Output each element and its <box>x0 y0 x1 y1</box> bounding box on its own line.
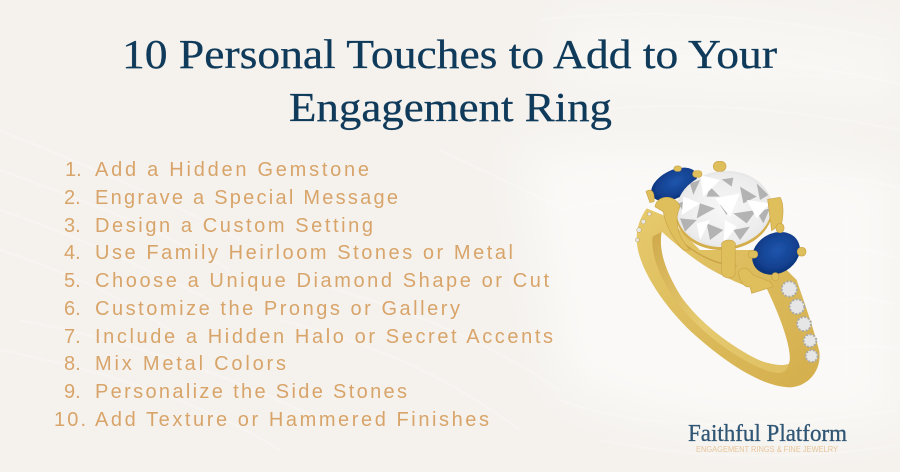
gallery rim <box>672 168 776 255</box>
accent diamonds <box>782 281 818 362</box>
numbered list: Customize the Prongs or Gallery <box>95 298 460 320</box>
numbered list: 1. <box>65 159 82 181</box>
title: Engagement Ring <box>289 84 612 130</box>
numbered list: 8. <box>64 353 81 375</box>
numbered list: 5. <box>64 270 81 292</box>
numbered list: Add Texture or Hammered Finishes <box>95 409 489 431</box>
numbered list: Add a Hidden Gemstone <box>95 159 369 181</box>
title: 10 Personal Touches to Add to Your <box>122 31 777 77</box>
left accent diamonds <box>635 212 651 242</box>
numbered list: Personalize the Side Stones <box>95 381 407 403</box>
numbered list: Engrave a Special Message <box>95 187 398 209</box>
numbered list: 2. <box>64 187 81 209</box>
numbered list: 4. <box>64 242 81 264</box>
numbered list: Choose a Unique Diamond Shape or Cut <box>95 270 549 292</box>
logo: Faithful Platform <box>688 421 847 447</box>
numbered list: Mix Metal Colors <box>95 353 286 375</box>
ring inner face <box>652 232 789 373</box>
numbered list: Include a Hidden Halo or Secret Accents <box>95 326 553 348</box>
numbered list: 3. <box>64 215 81 237</box>
ring band <box>637 208 820 387</box>
ring illustration <box>635 161 820 387</box>
logo: ENGAGEMENT RINGS & FINE JEWELRY <box>696 445 839 454</box>
gallery rail <box>680 240 737 266</box>
title <box>122 31 777 130</box>
prongs <box>646 161 806 293</box>
numbered list: Use Family Heirloom Stones or Metal <box>95 242 513 264</box>
numbered list: 6. <box>64 298 81 320</box>
numbered list <box>54 159 553 431</box>
left sapphire <box>646 161 702 208</box>
numbered list: 9. <box>64 381 81 403</box>
right sapphire <box>744 224 808 283</box>
numbered list: 7. <box>64 326 81 348</box>
numbered list: 10. <box>54 409 86 431</box>
center diamond <box>678 171 770 248</box>
numbered list: Design a Custom Setting <box>95 215 373 237</box>
